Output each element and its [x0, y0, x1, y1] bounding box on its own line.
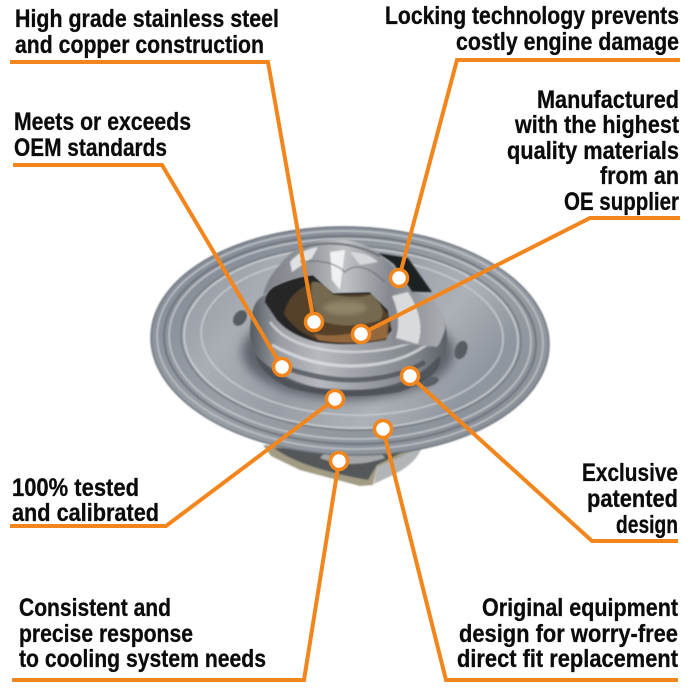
callout text: with the highest [514, 111, 680, 139]
marker dot [374, 420, 392, 438]
callout text: quality materials [507, 137, 679, 165]
flange holes [230, 308, 470, 389]
centre cup [242, 295, 454, 400]
marker dot [326, 390, 344, 408]
callout: original equipment design [374, 420, 679, 680]
callout text: Consistent and [19, 594, 171, 622]
callout text [19, 594, 266, 673]
copper element in opening [265, 275, 392, 344]
callout text: design [616, 511, 678, 539]
callout text: and copper construction [15, 31, 264, 59]
callout: locking technology [385, 2, 680, 286]
callout text [507, 86, 680, 216]
dome cage [263, 240, 445, 347]
callout text [385, 2, 679, 56]
callout text: and calibrated [12, 499, 159, 527]
outer flange disc [148, 222, 552, 460]
marker dot [390, 270, 408, 286]
marker dot [402, 368, 418, 384]
leader line [410, 376, 678, 541]
callout: OE supplier materials [352, 86, 680, 342]
callout text: from an [600, 162, 679, 190]
callout text [15, 5, 279, 59]
marker dot [274, 358, 290, 376]
callout text: patented [587, 485, 678, 513]
callout text [14, 108, 191, 162]
callout text: Meets or exceeds [14, 108, 191, 136]
callout: tested and calibrated [10, 390, 344, 527]
leader line [10, 62, 314, 323]
callout: stainless steel and copper [10, 5, 322, 330]
marker dot [330, 452, 348, 470]
callout text: 100% tested [12, 474, 139, 502]
callout: exclusive patented design [402, 368, 678, 541]
leader line [13, 165, 282, 367]
marker dot [352, 326, 370, 342]
callout text: Manufactured [537, 86, 679, 114]
callout text [582, 459, 678, 539]
callout text [457, 594, 679, 673]
leader line [12, 461, 339, 680]
callout text: OEM standards [14, 134, 167, 162]
marker dot [306, 314, 322, 330]
leader line [383, 429, 678, 680]
callout: consistent response [12, 452, 348, 680]
callout text: precise response [19, 620, 193, 648]
callout text: to cooling system needs [19, 645, 266, 673]
thermostat photo illustration [148, 222, 552, 486]
callout text [12, 474, 159, 527]
callout text: Exclusive [582, 459, 678, 487]
callout: OEM standards [13, 108, 290, 376]
bottom bracket [263, 445, 422, 486]
leader line [10, 399, 335, 526]
callout text: High grade stainless steel [15, 5, 279, 33]
leader line [361, 218, 680, 334]
leader line [399, 60, 680, 278]
